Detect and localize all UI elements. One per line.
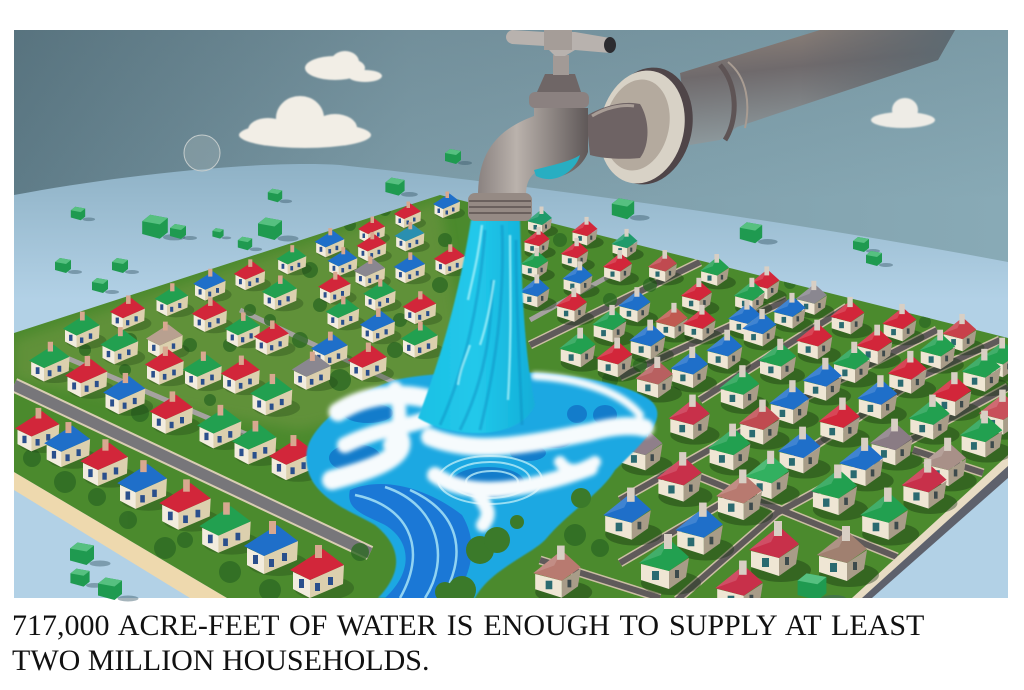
bushes in water — [435, 488, 591, 604]
outlet ring — [468, 193, 532, 221]
houses — [15, 192, 1024, 618]
cap — [529, 92, 589, 108]
icon: green cube on lot — [798, 573, 846, 598]
floating green cubes — [55, 149, 893, 602]
bushes — [23, 204, 931, 601]
swirls and deep water — [329, 403, 617, 497]
neck — [586, 103, 648, 159]
roads — [14, 385, 370, 553]
background sky — [14, 30, 1008, 598]
pipe — [680, 30, 955, 145]
caption — [12, 609, 924, 677]
flange — [593, 59, 703, 193]
moon bubble — [184, 135, 220, 171]
land: neighbourhood base — [14, 195, 1008, 601]
faucet body — [468, 30, 703, 221]
caption: TWO MILLION HOUSEHOLDS. — [12, 644, 429, 677]
foam — [332, 376, 645, 525]
water stream from faucet — [418, 220, 535, 433]
left lighter patches — [14, 200, 470, 430]
caption: 717,000 ACRE-FEET OF WATER IS ENOUGH TO SUPPLY AT LEAST — [12, 609, 924, 642]
handle — [506, 30, 610, 56]
background ground plane — [14, 164, 1008, 598]
water pool and river — [306, 372, 657, 604]
cloud: large — [239, 96, 371, 148]
river — [349, 484, 472, 598]
cloud: right — [871, 98, 935, 128]
body and spout — [478, 108, 588, 197]
cloud: small upper — [305, 51, 382, 82]
